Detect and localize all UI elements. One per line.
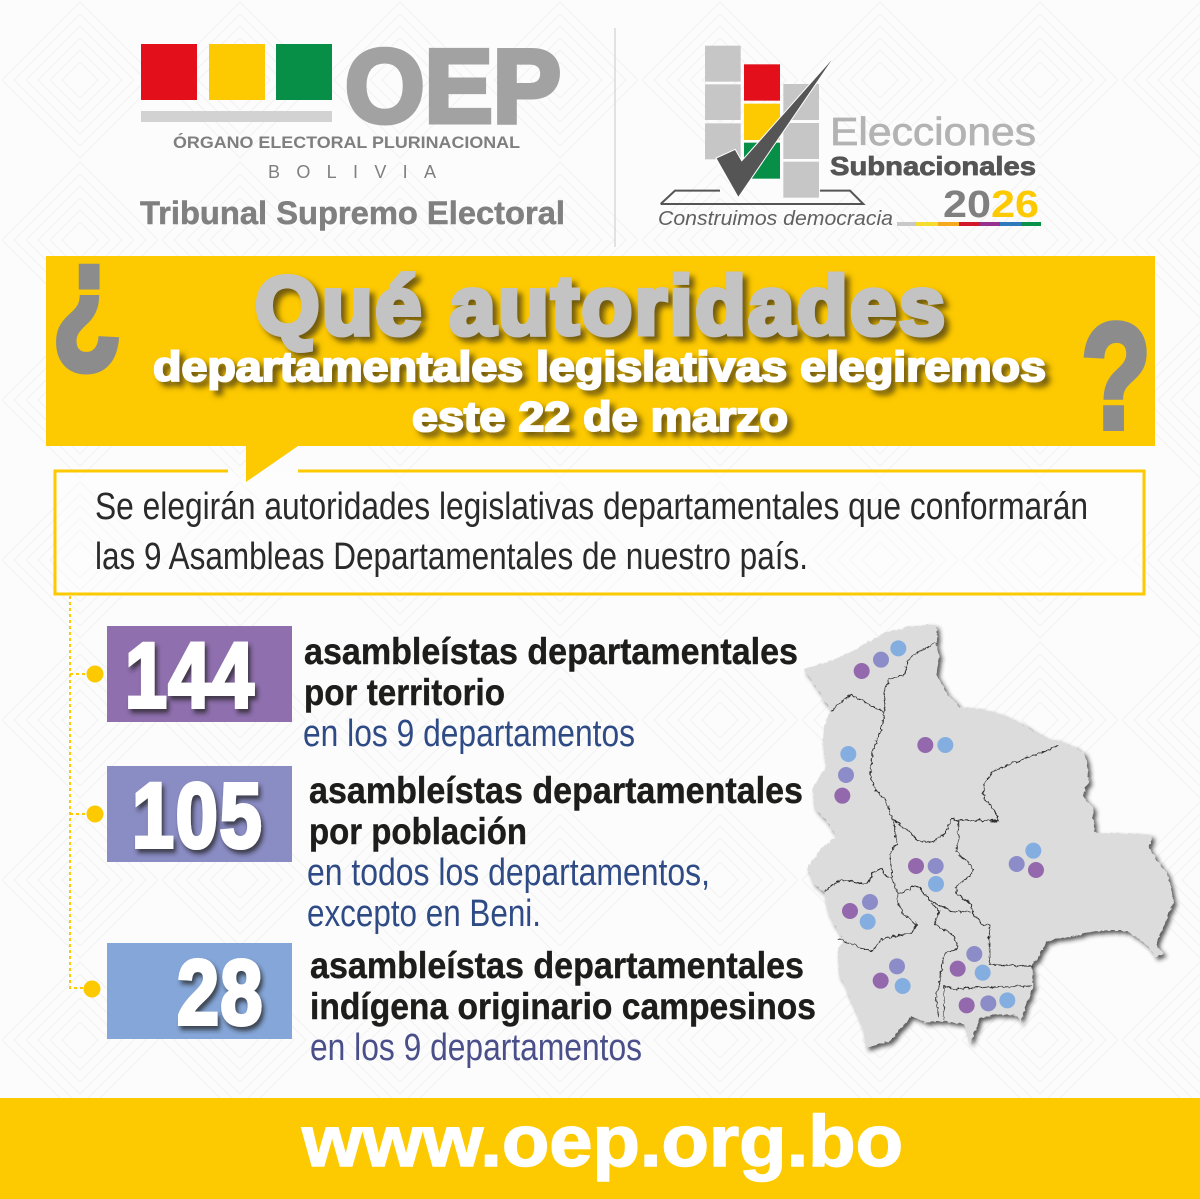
- icon: closing question mark: ?: [1081, 292, 1151, 460]
- title: [153, 259, 1046, 440]
- number box 28: 28: [177, 941, 262, 1044]
- number box 28: [107, 941, 292, 1044]
- title: este 22 de marzo: [412, 393, 788, 440]
- description 28: en los 9 departamentos: [310, 1027, 642, 1069]
- footer: website banner: www.oep.org.bo: [301, 1102, 903, 1182]
- icon: ballot blocks and check mark: [661, 46, 863, 204]
- number box 144: 144: [125, 624, 254, 727]
- stat: 144 por territorio: [107, 624, 798, 755]
- description 144: [303, 631, 798, 755]
- colour strip: [897, 222, 1041, 226]
- description 105: en todos los departamentos,: [307, 852, 710, 894]
- country name: BOLIVIA: [268, 162, 436, 182]
- department borders: [823, 642, 1057, 1018]
- slogan: Construimos democracia: [658, 208, 893, 230]
- OEP wordmark: OEP: [345, 29, 561, 145]
- Elecciones: Elecciones: [830, 111, 1036, 154]
- title: Qué autoridades: [255, 259, 945, 352]
- map outline: [803, 623, 1173, 1047]
- tribunal name: Tribunal Supremo Electoral: [140, 195, 565, 231]
- year 2026: 2026: [943, 184, 1039, 226]
- footer: website banner: [0, 1098, 1200, 1199]
- stat: 28 indígena originario campesinos: [107, 941, 816, 1069]
- icon: OEP flag squares: [141, 44, 332, 122]
- map: Bolivia departments: [803, 623, 1173, 1047]
- panel: description box outline: [55, 471, 1144, 594]
- timeline connector: [70, 596, 104, 998]
- description 105: asambleístas departamentales: [309, 770, 803, 811]
- description 144: asambleístas departamentales: [304, 631, 798, 672]
- icon: opening question mark: ¿: [52, 210, 122, 378]
- map dots: purple: [834, 663, 1044, 1013]
- map dots: blue: [840, 640, 1041, 1008]
- map dots: indigo: [838, 652, 1025, 1011]
- stat: 105 por población: [107, 764, 803, 935]
- title: departamentales legislativas elegiremos: [153, 343, 1046, 390]
- description 105: [307, 770, 803, 935]
- number box 105: 105: [132, 764, 262, 867]
- description 28: indígena originario campesinos: [310, 986, 816, 1027]
- description 144: en los 9 departamentos: [303, 713, 635, 755]
- description text: [95, 486, 1088, 578]
- organ name: ÓRGANO ELECTORAL PLURINACIONAL: [173, 133, 520, 152]
- description 28: asambleístas departamentales: [310, 945, 804, 986]
- description text: las 9 Asambleas Departamentales de nuestro país.: [95, 536, 808, 578]
- Subnacionales: Subnacionales: [830, 151, 1036, 181]
- logo: Elecciones Subnacionales 2026: [658, 46, 1041, 230]
- description 105: por población: [309, 811, 527, 852]
- description 144: por territorio: [304, 672, 505, 713]
- description 105: excepto en Beni.: [307, 893, 541, 935]
- description 28: [310, 945, 816, 1069]
- number box 144: [107, 624, 292, 727]
- panel: yellow question banner: [46, 210, 1155, 482]
- logo: OEP Tribunal Supremo Electoral: [140, 29, 565, 231]
